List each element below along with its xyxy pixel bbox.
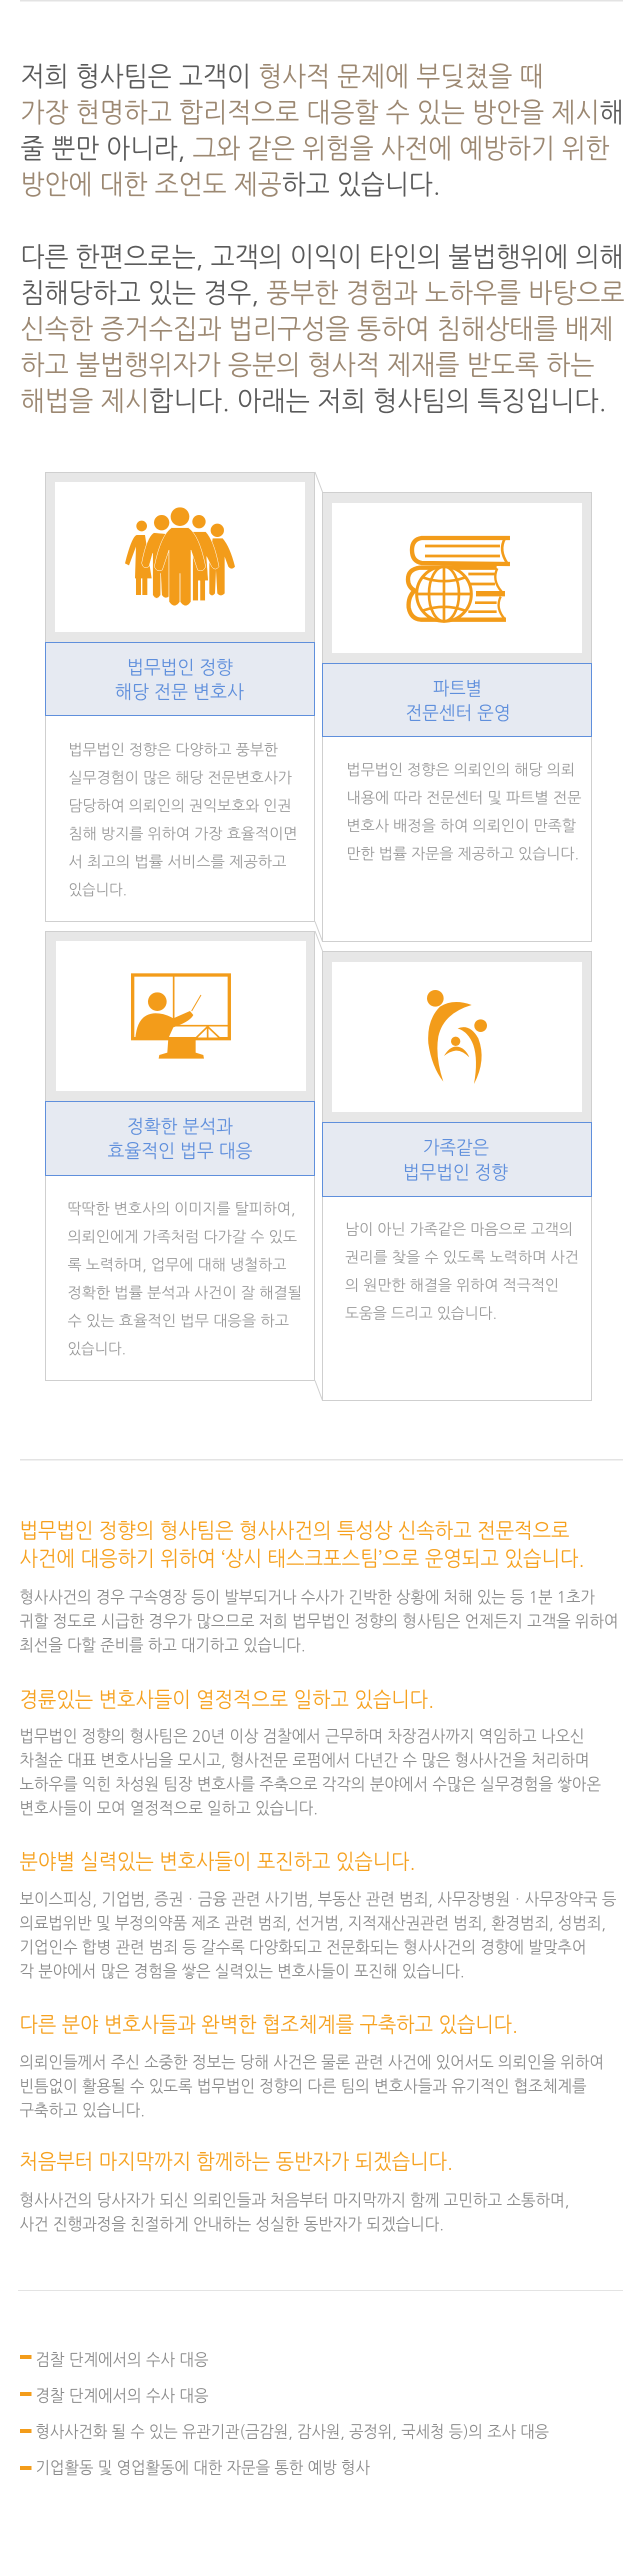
intro paragraph 1: 가장 현명하고 합리적으로 대응할 수 있는 방안을 제시해 [20, 99, 624, 126]
text: card 3 body: 록 노력하며, 업무에 대해 냉철하고 [68, 1257, 286, 1273]
panel: card 2 part-specialised centers [322, 492, 592, 942]
text: skilled by field body: 의료법위반 및 부정의약품 제조 관련 범죄, 선거범, 지적재산권관련 범죄, 환경범죄, 성범죄, [20, 1915, 606, 1932]
text: experienced lawyers body: 법무법인 정향의 형사팀은 20년 이상 검찰에서 근무하며 차장검사까지 역임하고 나오신 [20, 1728, 584, 1745]
panel: card 1 attorneys [46, 472, 314, 922]
intro paragraph 2: 해법을 제시합니다. 아래는 저희 형사팀의 특징입니다. [20, 388, 606, 414]
text: collaboration body: 의뢰인들께서 주신 소중한 정보는 당해 사건은 물론 관련 사건에 있어서도 의뢰인을 위하여 [20, 2054, 604, 2071]
text: card 4 body [345, 1222, 579, 1322]
text: skilled by field body [20, 1891, 617, 1980]
heading box: card 1: 법무법인 정향 [127, 658, 234, 677]
intro paragraph 1: 저희 형사팀은 고객이 형사적 문제에 부딪쳤을 때 [20, 63, 544, 90]
heading box: card 2 [322, 664, 592, 736]
heading: skilled by field: 분야별 실력있는 변호사들이 포진하고 있습니다. [20, 1851, 416, 1873]
intro paragraph 2 [20, 244, 624, 414]
text: skilled by field body: 기업인수 합병 관련 범죄 등 갈수록 다양화되고 전문화되는 형사사건의 경향에 발맞추어 [20, 1939, 586, 1956]
text: card 3 body: 딱딱한 변호사의 이미지를 탈피하여, [68, 1201, 296, 1217]
text: collaboration body: 빈틈없이 활용될 수 있도록 법무법인 정향의 다른 팀의 변호사들과 유기적인 협조체계를 [20, 2078, 587, 2095]
text: card 2 body [346, 762, 582, 862]
heading box: card 3: 정확한 분석과 [127, 1117, 234, 1136]
section: skilled by field [20, 1851, 617, 1980]
text: card 1 body: 서 최고의 법률 서비스를 제공하고 [68, 854, 286, 870]
list item 2: 경찰 단계에서의 수사 대응 [36, 2388, 209, 2404]
icon: group of people [125, 507, 235, 606]
heading: experienced lawyers: 경륜있는 변호사들이 열정적으로 일하고 있습니다. [20, 1689, 434, 1711]
text: experienced lawyers body: 차철순 대표 변호사님을 모시고, 형사전문 로펌에서 다년간 수 많은 형사사건을 처리하며 [20, 1752, 590, 1769]
text: experienced lawyers body [20, 1728, 601, 1817]
heading: task force team [20, 1520, 584, 1570]
text: card 2 body: 법무법인 정향은 의뢰인의 해당 의뢰 [346, 762, 575, 778]
text: card 4 body: 권리를 찾을 수 있도록 노력하며 사건 [345, 1250, 579, 1266]
intro paragraph 2: 다른 한편으로는, 고객의 이익이 타인의 불법행위에 의해 [20, 244, 624, 270]
text: card 3 body: 있습니다. [68, 1341, 126, 1357]
text: card 3 body: 정확한 법률 분석과 사건이 잘 해결될 [68, 1285, 302, 1301]
heading: task force team: 사건에 대응하기 위하여 ‘상시 태스크포스팀’으로 운영되고 있습니다. [20, 1548, 584, 1570]
text: card 4 body: 도움을 드리고 있습니다. [345, 1306, 497, 1322]
text: card 2 body: 변호사 배정을 하여 의뢰인이 만족할 [346, 818, 577, 834]
list item 1: 검찰 단계에서의 수사 대응 [36, 2352, 209, 2368]
section: experienced lawyers [20, 1689, 601, 1817]
text: experienced lawyers body: 변호사들이 모여 열정적으로 일하고 있습니다. [20, 1800, 318, 1817]
text: card 1 body: 있습니다. [68, 882, 127, 898]
text: companion body: 형사사건의 당사자가 되신 의뢰인들과 처음부터 마지막까지 함께 고민하고 소통하며, [20, 2192, 570, 2209]
heading box: card 1 [46, 642, 314, 716]
heading box: card 4: 가족같은 [423, 1138, 489, 1157]
panel: card 3 accurate analysis [46, 932, 314, 1380]
text: task force body [20, 1589, 618, 1654]
list item 3: 형사사건화 될 수 있는 유관기관(금감원, 감사원, 공정위, 국세청 등)의 조사 대응 [36, 2424, 549, 2440]
fold connectors between cards [315, 472, 322, 1400]
heading box: card 4 [322, 1122, 592, 1196]
icon: books and globe [408, 538, 510, 621]
text: card 4 body: 남이 아닌 가족같은 마음으로 고객의 [345, 1222, 573, 1238]
heading box: card 2: 파트별 [433, 679, 482, 698]
intro paragraph 2: 침해당하고 있는 경우, 풍부한 경험과 노하우를 바탕으로 [20, 280, 624, 306]
text: card 1 body [68, 742, 298, 898]
text: card 2 body: 내용에 따라 전문센터 및 파트별 전문 [346, 790, 582, 806]
icon: presenter at board [133, 975, 229, 1059]
list: services [20, 2352, 549, 2476]
heading: collaboration: 다른 분야 변호사들과 완벽한 협조체계를 구축하고 있습니다. [20, 2014, 518, 2036]
intro paragraph 1: 줄 뿐만 아니라, 그와 같은 위험을 사전에 예방하기 위한 [20, 135, 610, 162]
text: card 3 body: 수 있는 효율적인 법무 대응을 하고 [68, 1313, 289, 1329]
heading: companion: 처음부터 마지막까지 함께하는 동반자가 되겠습니다. [20, 2151, 453, 2173]
list item 4: 기업활동 및 영업활동에 대한 자문을 통한 예방 형사 [36, 2460, 370, 2476]
section: collaboration [20, 2014, 604, 2119]
intro paragraph 2: 신속한 증거수집과 법리구성을 통하여 침해상태를 배제 [20, 316, 614, 342]
heading box: card 3 [46, 1102, 314, 1176]
text: card 1 body: 침해 방지를 위하여 가장 효율적이면 [68, 826, 298, 842]
text: task force body: 형사사건의 경우 구속영장 등이 발부되거나 수사가 긴박한 상황에 처해 있는 등 1분 1초가 [20, 1589, 595, 1606]
intro paragraph 2: 하고 불법행위자가 응분의 형사적 제재를 받도록 하는 [20, 352, 594, 378]
text: skilled by field body: 각 분야에서 많은 경험을 쌓은 실력있는 변호사들이 포진해 있습니다. [20, 1963, 464, 1980]
panel: card 4 family-like [322, 952, 592, 1400]
text: card 4 body: 의 원만한 해결을 위하여 적극적인 [345, 1278, 559, 1294]
heading box: card 2: 전문센터 운영 [406, 704, 510, 722]
text: card 3 body [68, 1201, 302, 1357]
text: card 1 body: 실무경험이 많은 해당 전문변호사가 [68, 770, 292, 786]
heading box: card 3: 효율적인 법무 대응 [108, 1142, 252, 1160]
heading box: card 4: 법무법인 정향 [403, 1163, 509, 1182]
text: task force body: 최선을 다할 준비를 하고 대기하고 있습니다. [20, 1637, 306, 1654]
text: card 1 body: 담당하여 의뢰인의 권익보호와 인권 [68, 798, 292, 814]
text: collaboration body [20, 2054, 604, 2119]
text: experienced lawyers body: 노하우를 익힌 차성원 팀장 변호사를 주축으로 각각의 분야에서 수많은 실무경험을 쌓아온 [20, 1776, 601, 1793]
heading box: card 1: 해당 전문 변호사 [115, 682, 244, 702]
text: collaboration body: 구축하고 있습니다. [20, 2102, 145, 2119]
section: task force [20, 1520, 618, 1654]
text: card 1 body: 법무법인 정향은 다양하고 풍부한 [68, 742, 279, 758]
heading: task force team: 법무법인 정향의 형사팀은 형사사건의 특성상 신속하고 전문적으로 [20, 1520, 570, 1542]
icon: family [427, 990, 487, 1084]
intro paragraph 1 [20, 63, 624, 198]
text: companion body: 사건 진행과정을 친절하게 안내하는 성실한 동반자가 되겠습니다. [20, 2216, 444, 2233]
text: card 3 body: 의뢰인에게 가족처럼 다가갈 수 있도 [68, 1229, 297, 1245]
intro paragraph 1: 방안에 대한 조언도 제공하고 있습니다. [20, 171, 440, 198]
text: companion body [20, 2192, 570, 2233]
text: skilled by field body: 보이스피싱, 기업범, 증권ㆍ금융 관련 사기범, 부동산 관련 범죄, 사무장병원ㆍ사무장약국 등 [20, 1891, 617, 1908]
text: card 2 body: 만한 법률 자문을 제공하고 있습니다. [346, 846, 579, 862]
section: companion [20, 2151, 570, 2233]
